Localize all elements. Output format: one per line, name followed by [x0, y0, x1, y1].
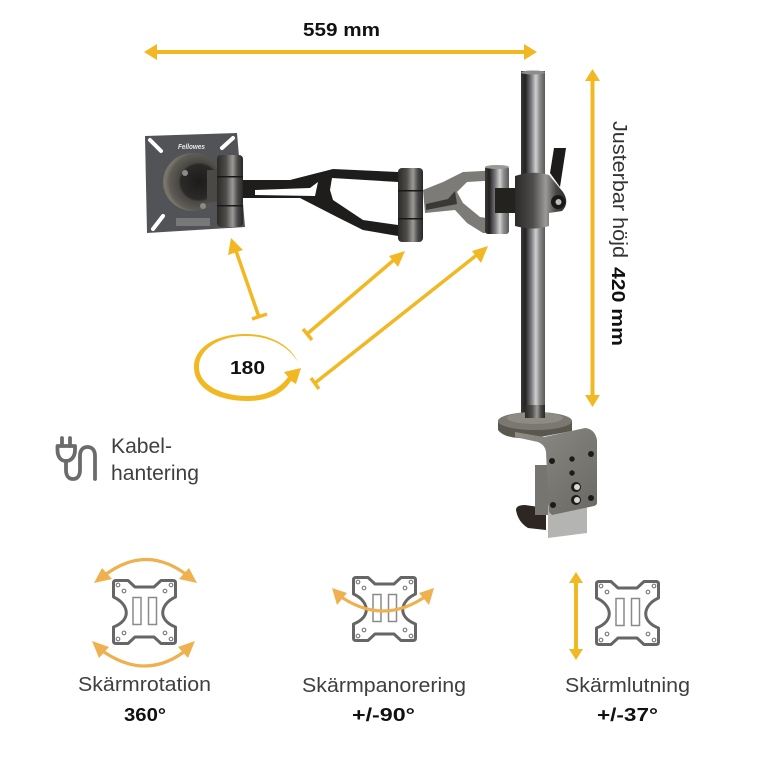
label: 180: 180: [230, 358, 265, 378]
value: 360°: [124, 705, 166, 725]
arrowheads: [332, 588, 434, 605]
value: +/-90°: [352, 705, 415, 725]
label: Kabelhantering: Kabel-: [111, 435, 172, 458]
feature: screen panning: [302, 578, 466, 725]
rotation arrows: [97, 560, 192, 666]
reach arrow 1: [228, 238, 267, 319]
second arm segment: [423, 165, 509, 234]
desk clamp: [498, 405, 597, 538]
icon: cable plug: [58, 438, 95, 479]
label: 420 mm: 420 mm: [608, 267, 628, 346]
label: Justerbar höjd: Justerbar höjd: [608, 121, 630, 258]
panning arrow: [337, 594, 429, 611]
reach arrow 3: [311, 246, 488, 389]
mounting plate: [145, 133, 245, 233]
dimension arrow: height: [585, 69, 600, 407]
value: +/-37°: [597, 705, 658, 725]
label: Skärmpanorering: [302, 675, 466, 697]
label: Skärmlutning: [565, 675, 690, 697]
arm hinge barrel 1: [217, 155, 243, 227]
dimension arrow: width 559 mm: [144, 44, 537, 60]
arm hinge barrel 2: [398, 168, 423, 242]
feature: screen tilt: [565, 572, 690, 725]
logo text: Fellowes: [178, 142, 205, 151]
feature: screen rotation: [78, 560, 211, 725]
tilt arrow: [569, 572, 583, 660]
label: Kabelhantering: [111, 435, 199, 485]
mount icon: [596, 582, 658, 644]
first arm segment: [243, 169, 398, 236]
mount icon: [354, 578, 416, 640]
pole: [521, 70, 545, 416]
label: 559 mm: 559 mm: [303, 20, 380, 40]
arrowheads: [92, 568, 197, 658]
label: Kabelhantering: hantering: [111, 462, 199, 485]
product photo: monitor arm: [145, 70, 597, 538]
label: Skärmrotation: [78, 674, 211, 696]
pole collar and locking lever: [495, 148, 566, 228]
rotation arrow 180: [194, 334, 301, 401]
mount icon: [114, 580, 176, 644]
reach arrow 2: [303, 251, 405, 340]
